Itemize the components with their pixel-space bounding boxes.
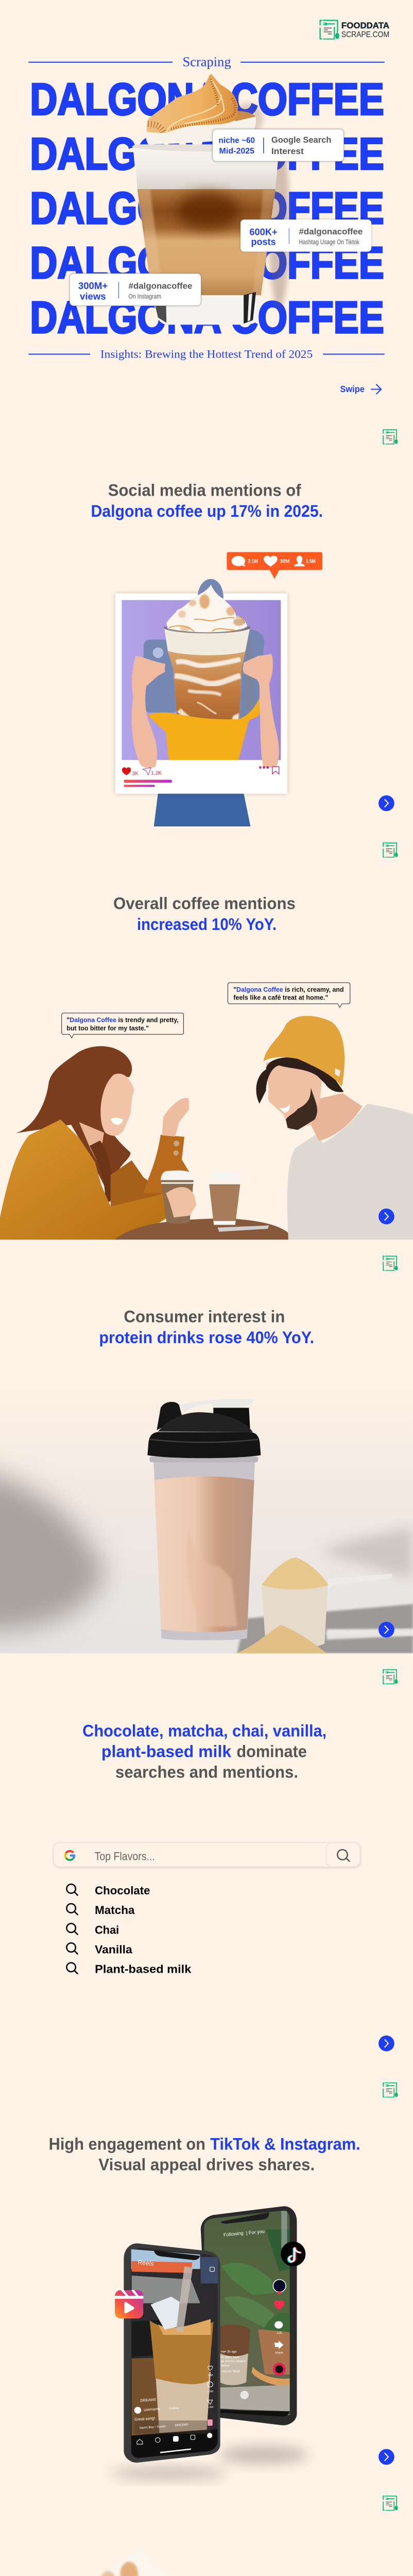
phone: tiktok screen: dation	[221, 2364, 230, 2367]
heading: flavors: Chocolate, matcha, chai, vanilla,	[82, 1721, 326, 1740]
table	[113, 1218, 293, 1241]
icon: google G	[65, 1851, 74, 1860]
notification badge: engagement counts: 30M	[280, 559, 289, 565]
heading: flavors: searches and mentions.	[115, 1762, 298, 1782]
phone: tiktok screen: | For you	[246, 2229, 265, 2236]
stat card: Instagram views: views	[80, 292, 106, 302]
search suggestions list	[66, 1884, 192, 1976]
title: repeated Dalgona Coffee	[30, 75, 384, 343]
icon: logo mark	[383, 429, 398, 444]
post actions: 3K	[132, 771, 139, 776]
swipe prompt with arrow	[340, 384, 381, 394]
stat card: Instagram views: #dalgonacoffee	[129, 281, 192, 291]
button: next arrow	[378, 1622, 394, 1638]
heading: coffee mentions: increased 10% YoY.	[137, 914, 277, 934]
phone: tiktok screen: on goes here	[221, 2355, 239, 2359]
swipe prompt with arrow: Swipe	[340, 384, 365, 394]
photo backdrop	[0, 1240, 413, 1653]
blue phone shape	[144, 579, 264, 720]
icon: logo mark	[383, 2082, 398, 2097]
phone: instagram reels screen: 1.9M	[208, 2390, 213, 2393]
panel: social media mentions	[91, 429, 398, 826]
stat card: Instagram views: On Instagram	[129, 293, 161, 300]
search suggestions list: Chai	[95, 1923, 119, 1936]
phone: tiktok screen: Following	[223, 2230, 244, 2238]
heading: engagement	[49, 2134, 360, 2174]
notification badge: engagement counts: 2.1M	[248, 559, 258, 565]
icon: logo mark	[383, 1669, 398, 1684]
stat card: Google Search Interest	[213, 129, 344, 161]
phone: instagram reels screen: Follow	[169, 2406, 179, 2411]
subtitle: insights: Insights: Brewing the Hottest Trend of 2025	[100, 348, 313, 361]
search bar: Top Flavors...	[95, 1850, 155, 1863]
heading: engagement: High engagement on	[49, 2134, 205, 2153]
arms and hands	[132, 654, 279, 768]
heading: coffee mentions	[113, 894, 296, 934]
icon: tiktok	[281, 2242, 305, 2266]
illustration: woman laughing	[0, 1046, 190, 1241]
icon: logo mark	[383, 2496, 398, 2511]
drink held up	[164, 584, 254, 720]
stat card: Google Search Interest: niche ~60	[219, 137, 255, 145]
phone: tiktok screen: me• 3h ago	[221, 2350, 237, 2354]
search suggestions list: Chocolate	[95, 1884, 150, 1897]
heading: protein interest	[99, 1307, 314, 1347]
post actions	[122, 766, 279, 787]
illustration: protein scoop	[236, 1557, 392, 1653]
jeans	[154, 793, 250, 826]
stat card: TikTok hashtag usage: Hashtag Usage On Tiktok	[299, 238, 359, 246]
kicker: Scraping: Scraping	[182, 54, 231, 69]
phone: tiktok screen: l sound ⁄ Mute	[221, 2370, 240, 2374]
phone: tiktok screen: gs #music #dance	[221, 2360, 247, 2363]
button: next arrow	[378, 2449, 394, 2465]
speech bubble: woman: "Dalgona Coffee is trendy and pretty,	[66, 1016, 179, 1024]
panel: challenges	[58, 2496, 398, 2576]
logo: FoodData Scrape: FOODDATA	[341, 21, 389, 30]
speech bubble: woman	[62, 1013, 184, 1038]
phone: instagram reels screen	[124, 2243, 220, 2463]
panel: protein drinks	[0, 1240, 413, 1653]
illustration: layered coffee glass	[132, 74, 290, 325]
stat card: TikTok hashtag usage: 600K+	[249, 227, 278, 238]
search suggestions list: Matcha	[95, 1904, 135, 1917]
phone: tiktok screen	[201, 2206, 297, 2425]
notification badge: engagement counts: 1.5M	[306, 559, 316, 565]
button: next arrow	[378, 2036, 394, 2052]
heading: coffee mentions: Overall coffee mentions	[113, 894, 296, 913]
illustration: iced coffee with whipped cream	[58, 2545, 215, 2576]
search suggestions list: Plant-based milk	[95, 1963, 192, 1976]
heading: protein interest: Consumer interest in	[124, 1307, 285, 1326]
logo: FoodData Scrape: SCRAPE.COM	[341, 30, 389, 39]
phone: instagram reels screen: Storm Boy • Xavier.	[139, 2425, 167, 2430]
heading: social mentions: Dalgona coffee up 17% in 2025.	[91, 501, 323, 520]
takeaway cups	[161, 1171, 269, 1232]
logo: FoodData Scrape	[319, 20, 389, 40]
shirt	[147, 694, 261, 760]
heading: social mentions: Social media mentions of	[108, 481, 301, 500]
stat card: Instagram views: 300M+	[78, 281, 108, 292]
speech bubble: man: feels like a café treat at home."	[233, 994, 328, 1002]
panel: hero	[28, 20, 389, 394]
phone: instagram reels screen: DREAMS	[175, 2423, 188, 2427]
stat card: TikTok hashtag usage: posts	[251, 237, 276, 248]
icon: logo mark	[383, 842, 398, 858]
illustration: man with yellow beanie	[256, 1016, 413, 1241]
phone: instagram reels screen: Great song!	[134, 2416, 155, 2422]
heading: flavors: dominate	[236, 1742, 307, 1761]
heading: flavors: plant-based milk	[101, 1742, 232, 1761]
post actions: 1,2K	[151, 770, 162, 776]
heading: social mentions	[91, 481, 323, 520]
polaroid post	[115, 579, 287, 794]
search suggestions list: Vanilla	[95, 1943, 133, 1956]
phone: instagram reels screen: 13M	[208, 2374, 213, 2377]
stat card: Instagram views	[70, 274, 201, 306]
search bar	[54, 1842, 360, 1868]
phone shadows	[111, 2446, 308, 2479]
stat card: Google Search Interest: Google Search	[271, 135, 331, 145]
phone: tiktok screen: share	[276, 2351, 283, 2354]
icon: instagram reels	[115, 2290, 143, 2318]
illustration: protein shaker	[147, 1399, 261, 1640]
icon: logo mark	[383, 1256, 398, 1271]
notification badge: engagement counts	[227, 552, 322, 579]
panel: tiktok and instagram	[49, 2082, 398, 2479]
stat card: TikTok hashtag usage	[240, 219, 371, 251]
speech bubble: man	[228, 982, 350, 1007]
heading: engagement: TikTok & Instagram.	[210, 2134, 360, 2153]
phone: tiktok screen: 105	[277, 2331, 282, 2335]
panel: top flavors	[54, 1669, 398, 2052]
heading: protein interest: protein drinks rose 40% YoY.	[99, 1328, 314, 1347]
button: next arrow	[378, 1209, 394, 1224]
stat card: TikTok hashtag usage: #dalgonacoffee	[299, 227, 363, 236]
speech bubble: man: "Dalgona Coffee is rich, creamy, and	[233, 986, 344, 993]
phone: instagram reels screen: DREAMS	[140, 2398, 157, 2403]
stat card: Google Search Interest: Interest	[271, 146, 304, 156]
panel: coffee mentions	[0, 842, 413, 1241]
button: next arrow	[378, 795, 394, 811]
phone: instagram reels screen: username	[144, 2407, 160, 2412]
stat card: Google Search Interest: Mid-2025	[219, 147, 254, 156]
phone: instagram reels screen: Reels	[137, 2259, 154, 2267]
heading: flavors	[82, 1721, 326, 1782]
heading: engagement: Visual appeal drives shares.	[98, 2155, 315, 2174]
phone: instagram reels screen: 1.4M	[208, 2406, 213, 2409]
speech bubble: woman: but too bitter for my taste."	[66, 1024, 149, 1032]
